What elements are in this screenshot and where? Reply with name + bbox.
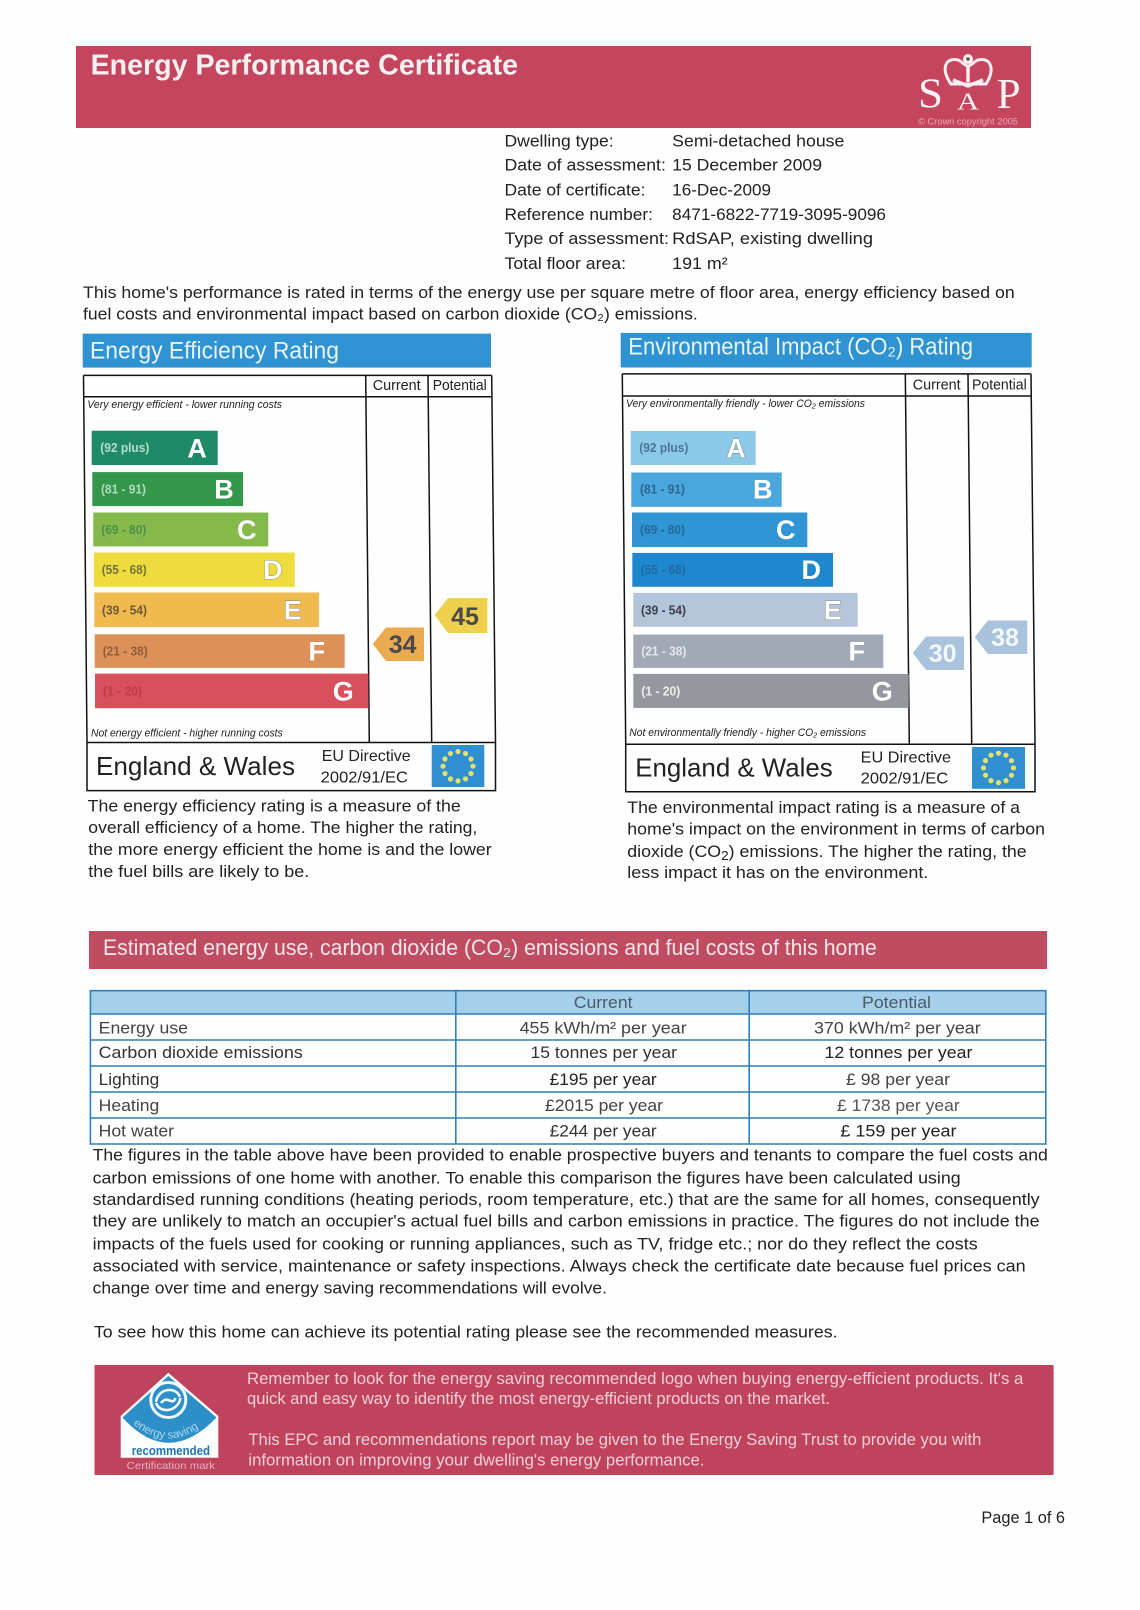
row: heating: Heating: [99, 1096, 159, 1115]
explanatory paragraph: standardised running conditions (heating periods, room temperature, etc.) that are the same for all homes, consequently: [93, 1190, 1040, 1209]
footer: England and Wales: EU Directive: [861, 750, 951, 767]
band G: G: [872, 676, 893, 706]
band E: (39 - 54): [641, 604, 686, 618]
band E: E: [284, 595, 302, 625]
band F: F: [308, 636, 325, 666]
dwelling details: Total floor area:: [504, 254, 626, 273]
description text: ) emissions. The higher the rating, the: [729, 842, 1027, 861]
description text: [627, 798, 1045, 882]
row: carbon dioxide emissions: Carbon dioxide emissions: [99, 1043, 303, 1062]
description text: less impact it has on the environment.: [627, 863, 928, 882]
band C: [632, 512, 807, 547]
explanatory paragraph: The figures in the table above have been provided to enable prospective buyers and tenants to compare the fuel costs and: [93, 1146, 1048, 1165]
band F: [633, 635, 883, 668]
band C: C: [776, 515, 795, 545]
scale top label: Very energy efficient - lower running costs: [87, 399, 282, 411]
band A: (92 plus): [100, 441, 149, 455]
dwelling details: [504, 132, 886, 273]
dwelling details: 16-Dec-2009: [672, 181, 771, 200]
icon: SAP crown logo: S: [918, 72, 943, 118]
band F: [95, 634, 345, 668]
row: energy use: 455 kWh/m² per year: [520, 1018, 687, 1037]
panel: energy saving recommended banner: [94, 1365, 1054, 1475]
footer: England and Wales: EU Directive: [322, 748, 411, 765]
explanatory paragraph: they are unlikely to match an occupier's actual fuel bills and carbon emissions in practice. The figures do not include the: [93, 1212, 1040, 1231]
heading: energy efficiency rating: Energy Efficiency Rating: [90, 338, 339, 365]
current rating arrow 30: [913, 636, 964, 670]
band A: (92 plus): [639, 441, 688, 455]
band B: (81 - 91): [101, 482, 146, 496]
intro text: [83, 283, 1015, 323]
current rating arrow 30: 30: [929, 640, 957, 668]
description text: overall efficiency of a home. The higher the rating,: [88, 818, 477, 837]
band C: (69 - 80): [640, 523, 685, 537]
column headings: Potential: [972, 377, 1027, 393]
scale bottom label: Not environmentally friendly - higher CO₂ emissions: [629, 727, 866, 739]
band D: D: [802, 555, 821, 585]
band E: (39 - 54): [102, 604, 147, 618]
dwelling details: Reference number:: [504, 205, 653, 224]
dwelling details: 191 m²: [672, 254, 728, 273]
banner text: [247, 1369, 1024, 1470]
section heading: estimated energy use: Estimated energy use, carbon dioxide (CO₂) emissions and fuel costs of this home: [103, 935, 877, 960]
chart frame: [84, 375, 496, 791]
band E: E: [824, 595, 842, 625]
row: energy use: 370 kWh/m² per year: [814, 1018, 981, 1037]
recommended measures note: To see how this home can achieve its potential rating please see the recommended measures.: [94, 1322, 838, 1341]
description text: The energy efficiency rating is a measure of the: [88, 796, 461, 815]
current rating arrow 34: [373, 628, 424, 661]
banner text: quick and easy way to identify the most energy-efficient products on the market.: [247, 1389, 830, 1408]
explanatory paragraph: impacts of the fuels used for cooking or running appliances, such as TV, fridge etc.; nor do they reflect the costs: [93, 1234, 978, 1253]
band F: F: [848, 636, 865, 666]
description text: the fuel bills are likely to be.: [88, 862, 309, 881]
table: energy use and costs: [90, 991, 1046, 1144]
band G: [95, 674, 368, 708]
dwelling details: Semi-detached house: [672, 132, 844, 151]
banner text: information on improving your dwelling's energy performance.: [248, 1451, 704, 1470]
potential rating arrow 38: 38: [991, 624, 1019, 652]
explanatory paragraph: associated with service, maintenance or safety inspections. Always check the certificate date because fuel prices can: [93, 1257, 1026, 1276]
band D: [94, 552, 295, 587]
dwelling details: Dwelling type:: [504, 132, 614, 151]
explanatory paragraph: carbon emissions of one home with another. To enable this comparison the figures have been calculated using: [93, 1168, 961, 1187]
panel: environmental impact rating: [621, 333, 1045, 882]
band G: G: [333, 676, 354, 706]
dwelling details: 15 December 2009: [672, 156, 822, 175]
band D: D: [263, 555, 282, 585]
row: hot water: £ 159 per year: [840, 1122, 957, 1141]
dwelling details: 8471-6822-7719-3095-9096: [672, 205, 886, 224]
potential rating arrow 45: [435, 598, 487, 633]
explanatory paragraph: [93, 1146, 1048, 1297]
band C: [93, 512, 268, 546]
row: heating: £2015 per year: [545, 1096, 663, 1115]
band E: [633, 593, 858, 627]
dwelling details: Date of assessment:: [504, 156, 666, 175]
icon: energy saving recommended logo: energy saving: [134, 1420, 199, 1440]
row: hot water: Hot water: [99, 1122, 174, 1141]
intro text: fuel costs and environmental impact based on carbon dioxide (CO₂) emissions.: [83, 304, 698, 323]
band B: B: [214, 474, 234, 504]
row: lighting: £195 per year: [550, 1070, 657, 1089]
icon: SAP crown logo: © Crown copyright 2005: [918, 116, 1018, 127]
icon: SAP crown logo: [918, 54, 1021, 127]
row: lighting: Lighting: [99, 1070, 159, 1089]
scale top label: Very environmentally friendly - lower CO₂ emissions: [626, 398, 865, 410]
dwelling details: Date of certificate:: [504, 181, 646, 200]
band D: [632, 553, 833, 587]
row: hot water: £244 per year: [550, 1122, 657, 1141]
column headings: Potential: [433, 378, 487, 394]
footer: England and Wales: 2002/91/EC: [321, 770, 408, 786]
column headings: Current: [913, 377, 961, 393]
row: energy use: [99, 1018, 981, 1037]
description text: the more energy efficient the home is and the lower: [88, 840, 492, 859]
footer: England and Wales: 2002/91/EC: [861, 770, 948, 788]
row: carbon dioxide emissions: 12 tonnes per year: [824, 1043, 973, 1062]
current rating arrow 34: 34: [389, 631, 417, 659]
section heading: estimated energy use: [89, 931, 1047, 969]
panel: energy efficiency rating: [83, 334, 495, 881]
band B: [92, 472, 243, 506]
band F: (21 - 38): [103, 644, 148, 658]
band D: (55 - 68): [102, 563, 147, 577]
intro text: This home's performance is rated in terms of the energy use per square metre of floor area, energy efficiency based on: [83, 283, 1015, 302]
table header: Potential: [862, 993, 931, 1012]
band B: B: [753, 474, 772, 504]
row: hot water: [99, 1122, 957, 1141]
banner text: This EPC and recommendations report may be given to the Energy Saving Trust to provide you with: [248, 1430, 981, 1449]
description text: The environmental impact rating is a measure of a: [627, 798, 1021, 817]
description text: [88, 796, 492, 881]
potential rating arrow 38: [975, 620, 1027, 654]
band F: (21 - 38): [641, 644, 686, 658]
band B: (81 - 91): [640, 482, 685, 496]
row: heating: £ 1738 per year: [837, 1096, 960, 1115]
chart frame: [622, 374, 1035, 792]
row: lighting: £ 98 per year: [846, 1070, 950, 1089]
icon: energy saving recommended logo: Certification mark: [127, 1460, 216, 1472]
column headings: [913, 377, 1027, 393]
band C: C: [237, 515, 256, 545]
potential rating arrow 45: 45: [451, 603, 479, 631]
band E: [94, 592, 319, 627]
title: Energy Performance Certificate: [91, 49, 518, 81]
icon: SAP crown logo: P: [997, 72, 1021, 118]
column headings: Current: [373, 378, 421, 394]
row: carbon dioxide emissions: 15 tonnes per year: [530, 1043, 677, 1062]
page number: Page 1 of 6: [981, 1508, 1065, 1527]
footer: England and Wales: England & Wales: [96, 751, 295, 781]
footer: England and Wales: England & Wales: [635, 752, 833, 782]
row: heating: [99, 1096, 960, 1115]
banner text: Remember to look for the energy saving recommended logo when buying energy-efficient products. It's a: [247, 1369, 1024, 1388]
icon: energy saving recommended logo: [120, 1372, 218, 1472]
scale bottom label: Not energy efficient - higher running costs: [91, 727, 283, 739]
explanatory paragraph: change over time and energy saving recommendations will evolve.: [93, 1278, 607, 1297]
footer: England and Wales: [96, 748, 411, 786]
column headings: [373, 378, 487, 394]
band A: A: [187, 433, 207, 463]
band G: (1 - 20): [103, 684, 142, 698]
icon: EU flag: [972, 747, 1025, 789]
header banner: [76, 46, 1031, 128]
heading: energy efficiency rating: [83, 334, 491, 368]
band G: [633, 674, 909, 708]
band B: [631, 472, 782, 507]
band A: A: [726, 433, 746, 463]
dwelling details: RdSAP, existing dwelling: [672, 229, 873, 248]
band A: [631, 431, 756, 465]
heading: environmental impact rating: Environmental Impact (CO₂) Rating: [628, 333, 973, 360]
description text: 2: [721, 848, 729, 863]
dwelling details: Type of assessment:: [504, 229, 669, 248]
table header: Current: [574, 993, 633, 1012]
footer: England and Wales: [635, 750, 951, 788]
description text: home's impact on the environment in terms of carbon: [627, 819, 1045, 838]
band G: (1 - 20): [641, 684, 680, 698]
icon: EU flag: [432, 745, 484, 787]
table header: [574, 993, 931, 1012]
icon: SAP crown logo: A: [957, 89, 980, 115]
row: energy use: Energy use: [99, 1018, 188, 1037]
band C: (69 - 80): [101, 523, 146, 537]
band A: [92, 431, 218, 465]
row: lighting: [99, 1070, 950, 1089]
description text: dioxide (CO: [627, 842, 717, 861]
band D: (55 - 68): [641, 563, 686, 577]
row: carbon dioxide emissions: [99, 1043, 973, 1062]
icon: energy saving recommended logo: recommended: [132, 1444, 210, 1458]
